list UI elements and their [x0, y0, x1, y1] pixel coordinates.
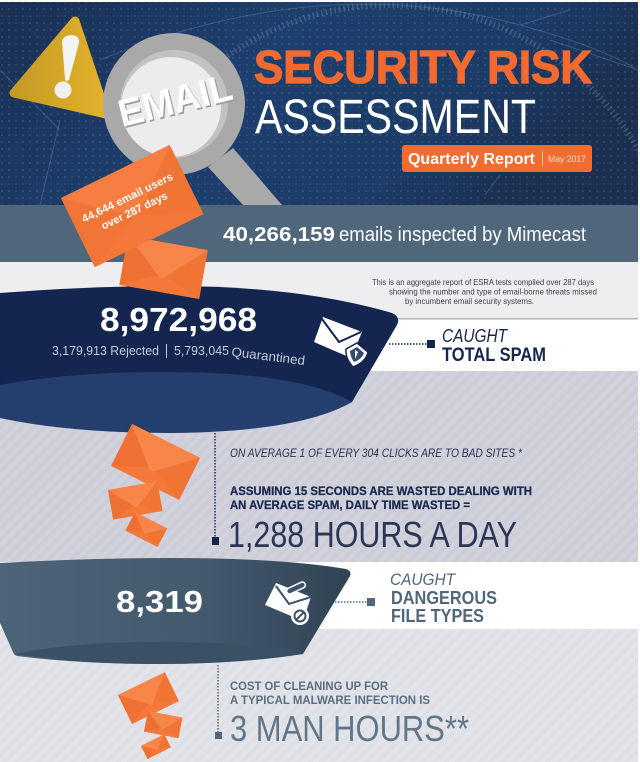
icon: incoming envelope — [119, 236, 208, 299]
text: cost of cleaning: COST OF CLEANING UP FOR — [230, 681, 389, 693]
text: report note — [372, 278, 597, 306]
icon: envelope group two — [118, 672, 182, 759]
text: rejected and quarantined: 5,793,045 — [174, 343, 229, 358]
connector: hours a day — [212, 433, 219, 545]
text: cost of cleaning: A TYPICAL MALWARE INFECTION IS — [230, 695, 430, 707]
icon: large envelope with user count: over 287 days — [100, 190, 170, 232]
text: caught total spam — [442, 326, 546, 366]
icon: warning triangle — [14, 21, 106, 114]
title: SECURITY RISK — [254, 41, 592, 93]
panel: emails inspected band: emails inspected by Mimecast — [339, 224, 586, 246]
chart: funnel one — [0, 286, 398, 433]
title — [254, 41, 592, 144]
text: caught dangerous file types: CAUGHT — [390, 570, 456, 589]
text: 1,288 hours a day: 1,288 HOURS A DAY — [228, 514, 517, 555]
label: EMAIL on lens: EMAIL — [116, 68, 238, 137]
panel: light section — [0, 262, 638, 318]
panel: grey spam section — [0, 371, 638, 562]
panel: emails inspected band: 40,266,159 — [223, 224, 335, 246]
text: cost of cleaning — [230, 681, 430, 707]
icon: magnifying glass — [103, 33, 282, 205]
text: rejected and quarantined: 3,179,913 Rejected — [52, 343, 159, 358]
panel: lower grey section — [0, 629, 638, 762]
icon: large envelope with user count — [61, 145, 204, 267]
text: rejected and quarantined: Quarantined — [231, 344, 306, 368]
text: 8,319: 8,319 — [116, 584, 203, 619]
text: bad sites statistic: ON AVERAGE 1 OF EVERY 304 CLICKS ARE TO BAD SITES * — [230, 446, 522, 460]
icon: large envelope with user count: 44,644 email users — [80, 171, 175, 226]
text: caught dangerous file types — [390, 570, 497, 626]
badge: quarterly report: May 2017 — [548, 154, 586, 164]
text: report note: by incumbent email security systems. — [405, 297, 534, 306]
label: EMAIL on lens: EMAIL — [114, 67, 237, 136]
text: time wasted — [230, 484, 532, 512]
panel: caught dangerous strip — [0, 562, 638, 629]
text: caught total spam: TOTAL SPAM — [442, 345, 546, 366]
text: caught dangerous file types: DANGEROUS — [391, 588, 497, 608]
text: report note: showing the number and type of email-borne threats missed — [389, 288, 597, 296]
panel: emails inspected band — [0, 205, 638, 262]
badge: quarterly report — [402, 145, 592, 172]
icon: envelope with shield — [314, 317, 368, 367]
connector: dangerous file types — [335, 598, 375, 606]
chart: funnel two — [0, 558, 350, 664]
text: time wasted: AN AVERAGE SPAM, DAILY TIME WASTED = — [230, 498, 470, 512]
text: time wasted: ASSUMING 15 SECONDS ARE WASTED DEALING WITH — [230, 484, 532, 498]
panel: header background — [0, 2, 640, 575]
text: caught total spam: CAUGHT — [442, 326, 509, 346]
title: ASSESSMENT — [255, 91, 536, 144]
text: 3 man hours: 3 MAN HOURS** — [230, 708, 469, 749]
badge: quarterly report: Quarterly Report — [408, 151, 536, 168]
connector: man hours — [215, 665, 222, 739]
text: rejected and quarantined — [52, 343, 306, 368]
connector: total spam — [389, 340, 435, 348]
text: report note: This is an aggregate report of ESRA tests compiled over 287 days — [372, 278, 594, 287]
text: caught dangerous file types: FILE TYPES — [391, 606, 484, 626]
panel: caught total spam strip — [0, 318, 638, 371]
icon: envelope with paperclip — [265, 581, 311, 625]
icon: envelope group one — [108, 424, 200, 547]
text: 8,972,968: 8,972,968 — [100, 301, 257, 338]
